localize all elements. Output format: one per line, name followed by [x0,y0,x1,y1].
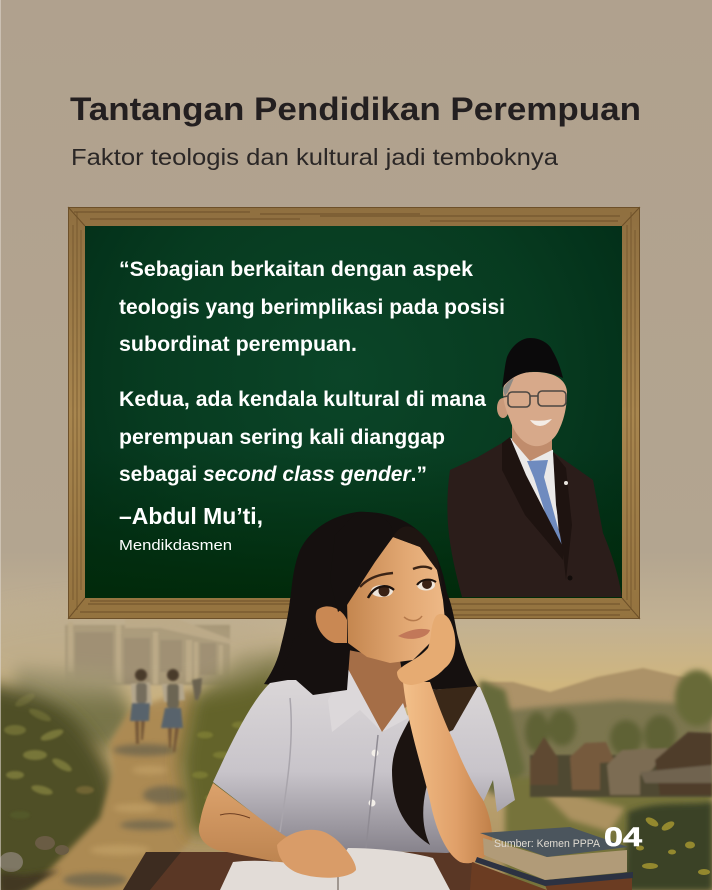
student left [130,669,152,744]
path shadows [63,744,187,887]
shirt placket [366,735,378,848]
speaker name: –Abdul Mu’ti, [119,503,263,529]
grey temple hair [503,378,514,396]
house two [570,742,615,790]
source note: Sumber: Kemen PPPA [494,838,601,850]
student far [192,678,202,700]
right tree [675,670,712,726]
students walking [130,669,202,752]
bottom book [470,862,632,890]
smile [530,419,552,426]
heading: subtitle: Faktor teologis dan kultural jadi temboknya [71,144,558,170]
house four [655,732,712,795]
hair over shoulder [280,610,350,695]
illustration: girl at desk [123,512,515,890]
nose [404,616,422,621]
board bottom shade [85,226,622,598]
left arm [199,783,300,868]
rocks [0,836,69,872]
wooden frame [68,207,640,619]
lower right bush [625,802,712,890]
shirt collar and front [510,438,559,535]
quote line 5: perempuan sering kali dianggap [119,426,445,449]
student right [161,669,185,752]
shirt buttons [368,750,378,806]
quote line 2: teologis yang berimplikasi pada posisi [119,296,505,319]
village houses [530,732,712,797]
left lapel [502,437,563,560]
eyebrows [360,567,432,587]
left foliage [0,680,116,890]
speaker role: Mendikdasmen [119,538,232,554]
hair fringe right [393,526,444,595]
page number: 04 [604,822,642,852]
landscape background [0,605,712,890]
quote line 3: subordinat perempuan. [119,333,357,356]
hair back [264,512,480,730]
ear [316,606,347,643]
face [503,372,567,446]
neck [345,650,408,732]
left eye [368,585,394,598]
quote text [119,258,505,486]
quote line 1: “Sebagian berkaitan dengan aspek [119,258,473,281]
hand on cheek [397,614,455,685]
top book cover [480,827,628,857]
peci cap [502,338,563,388]
right lapel [553,452,572,580]
heading: title: Tantangan Pendidikan Perempuan [70,91,641,127]
hand on book [277,830,356,878]
ear [497,398,509,418]
meadow ground [505,775,712,890]
book stack [470,827,633,890]
chalkboard with wooden frame [68,207,640,619]
elbow crease [220,814,250,818]
collar [328,667,408,732]
wooden desk [123,852,480,890]
house one [530,737,558,785]
quote line 4: Kedua, ada kendala kultural di mana [119,388,486,411]
raised forearm [403,682,492,863]
hair fringe left [330,512,393,612]
long hair strand [392,700,432,845]
house four wall [640,765,712,783]
bottom left dark ground [0,870,60,890]
glasses [503,391,566,407]
distant mountains [480,668,712,760]
middle leaves [192,722,248,802]
foggy bushes [15,665,135,750]
portrait: Abdul Mu'ti [447,338,622,597]
left leaves [4,691,94,819]
open book [220,848,450,890]
left edge line [0,0,1,890]
face [347,537,445,663]
tree line [525,710,676,756]
village dirt road [537,787,625,832]
middle bushes [180,650,285,835]
school building [65,618,232,685]
hair highlights [430,686,478,735]
soft fog [0,605,290,695]
board surface [85,226,622,598]
sleeve fold [280,698,291,832]
lower right leaves [636,815,710,875]
suit jacket [447,443,622,597]
path highlights [90,766,168,855]
jacket pin [564,481,568,485]
tree behind sleeve [480,680,525,790]
lips [398,629,430,639]
desk dark plank [123,852,181,890]
middle ridge [490,700,712,795]
top book pages [483,838,627,880]
house shadows [530,755,712,797]
jacket button [568,576,572,580]
necktie [527,460,562,547]
dirt path [25,690,200,890]
neck [512,425,552,461]
middle book cover [475,857,633,886]
right eye [417,579,436,590]
quote line 6: sebagai second class gender.” [119,463,427,486]
blouse [213,672,515,853]
house three [607,748,668,795]
